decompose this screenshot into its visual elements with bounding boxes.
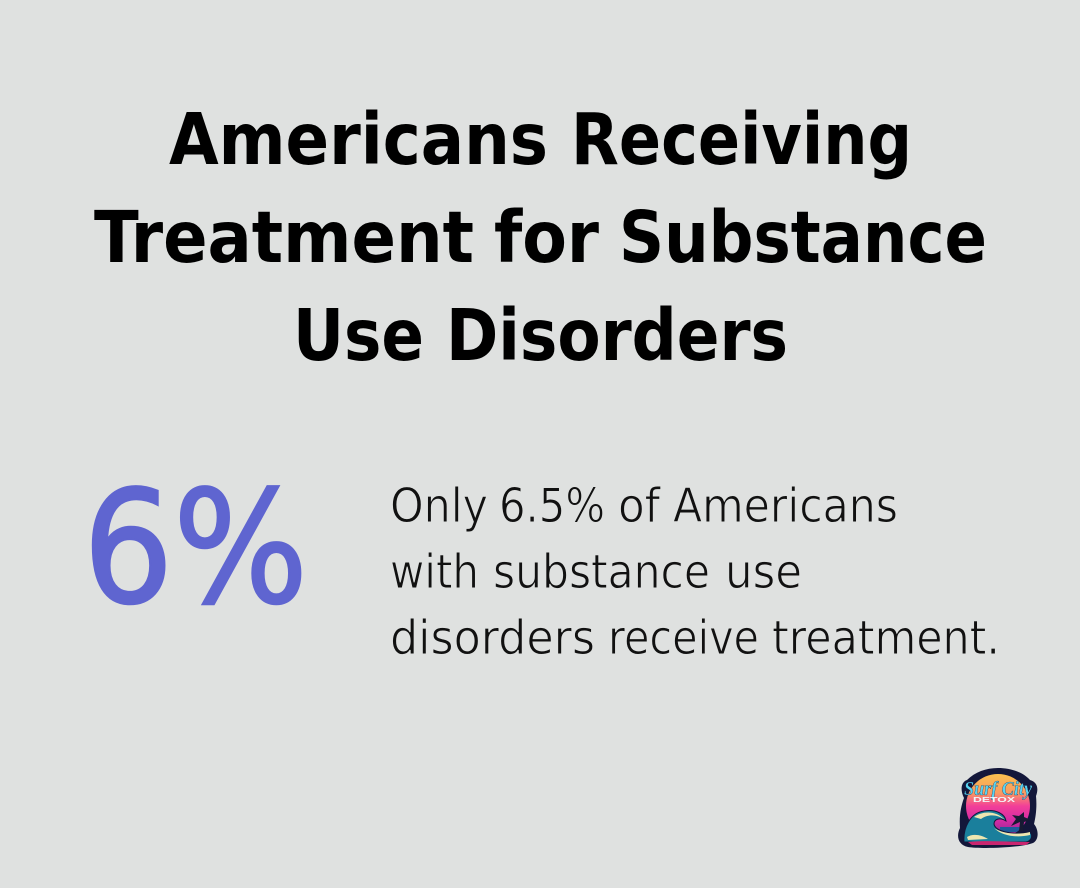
logo detox label: DETOX	[973, 795, 1015, 804]
title	[94, 98, 987, 377]
title: Use	[293, 294, 424, 377]
statistic description: use	[725, 545, 802, 600]
statistic description	[390, 479, 1000, 666]
title: Receiving	[571, 98, 912, 181]
statistic description: Americans	[673, 479, 898, 534]
logo wave foam	[967, 812, 1030, 840]
title: Americans	[169, 98, 548, 181]
statistic description: of	[618, 479, 661, 534]
big statistic: 6%: 6%	[83, 457, 308, 639]
title: Substance	[619, 196, 987, 279]
logo wave	[964, 811, 1032, 842]
logo palm silhouette	[1011, 812, 1031, 831]
statistic description: with	[390, 545, 479, 600]
statistic description: substance	[493, 545, 710, 600]
statistic description: receive	[608, 611, 759, 666]
logo backing	[958, 768, 1038, 848]
statistic description: treatment.	[772, 611, 1000, 666]
statistic description: 6.5%	[499, 479, 605, 534]
logo: Surf City Detox wave badge	[958, 768, 1038, 848]
statistic description: disorders	[390, 611, 595, 666]
title: Treatment	[94, 196, 474, 279]
title: for	[494, 196, 599, 279]
logo script name: Surf City	[964, 778, 1032, 800]
logo sun	[966, 774, 1030, 833]
logo shore	[968, 841, 1030, 845]
title: Disorders	[446, 294, 788, 377]
statistic description: Only	[390, 479, 488, 534]
